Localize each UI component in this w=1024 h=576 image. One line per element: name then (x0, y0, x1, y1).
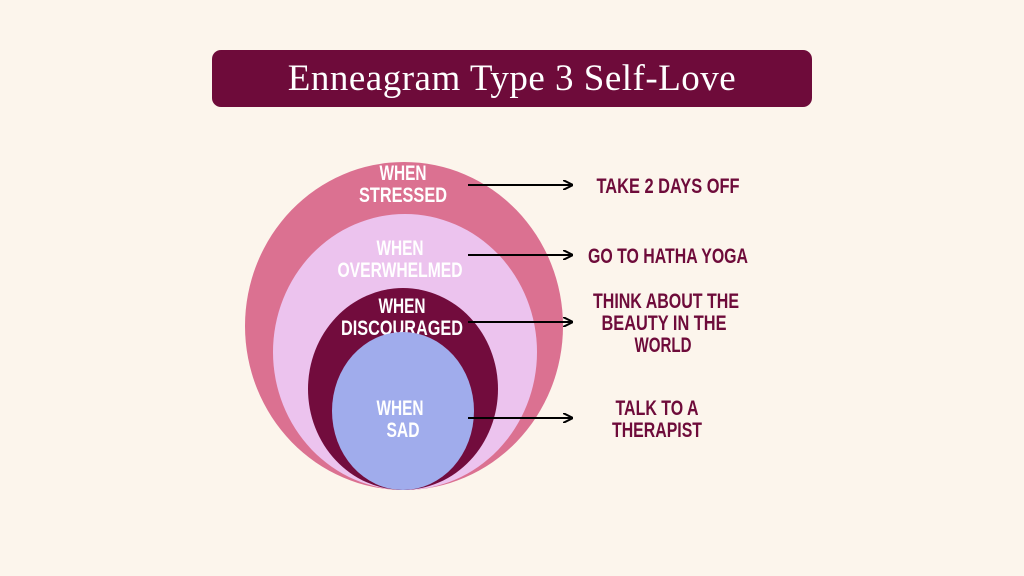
circle: discouraged: WHEN (378, 295, 426, 318)
arrow 4 (468, 417, 572, 419)
circle: sad: SAD (386, 419, 420, 442)
action: beauty (593, 290, 739, 357)
action: beauty: THINK ABOUT THE (593, 290, 739, 313)
action: beauty: BEAUTY IN THE (602, 312, 726, 335)
arrow 3 (468, 321, 572, 323)
action: hatha yoga: GO TO HATHA YOGA (588, 245, 748, 268)
circle: stressed: WHEN (380, 162, 426, 185)
arrow 1 (468, 184, 572, 186)
circle: overwhelmed: OVERWHELMED (338, 259, 462, 282)
circle: discouraged: DISCOURAGED (341, 317, 463, 340)
circle: overwhelmed: WHEN (376, 237, 424, 260)
circle: stressed (245, 162, 563, 490)
action: therapist (612, 397, 702, 442)
circle: sad: WHEN (376, 397, 424, 420)
arrow 2 (468, 254, 572, 256)
action: beauty: WORLD (634, 334, 692, 357)
action: take 2 days off: TAKE 2 DAYS OFF (596, 175, 740, 198)
circle: overwhelmed (273, 214, 537, 490)
action: therapist: THERAPIST (612, 419, 702, 442)
circle: sad (332, 332, 474, 490)
circle: discouraged (308, 288, 498, 490)
action: therapist: TALK TO A (616, 397, 698, 420)
title (212, 50, 812, 107)
circle: stressed: STRESSED (359, 184, 447, 207)
title: Enneagram Type 3 Self-Love (288, 58, 736, 99)
